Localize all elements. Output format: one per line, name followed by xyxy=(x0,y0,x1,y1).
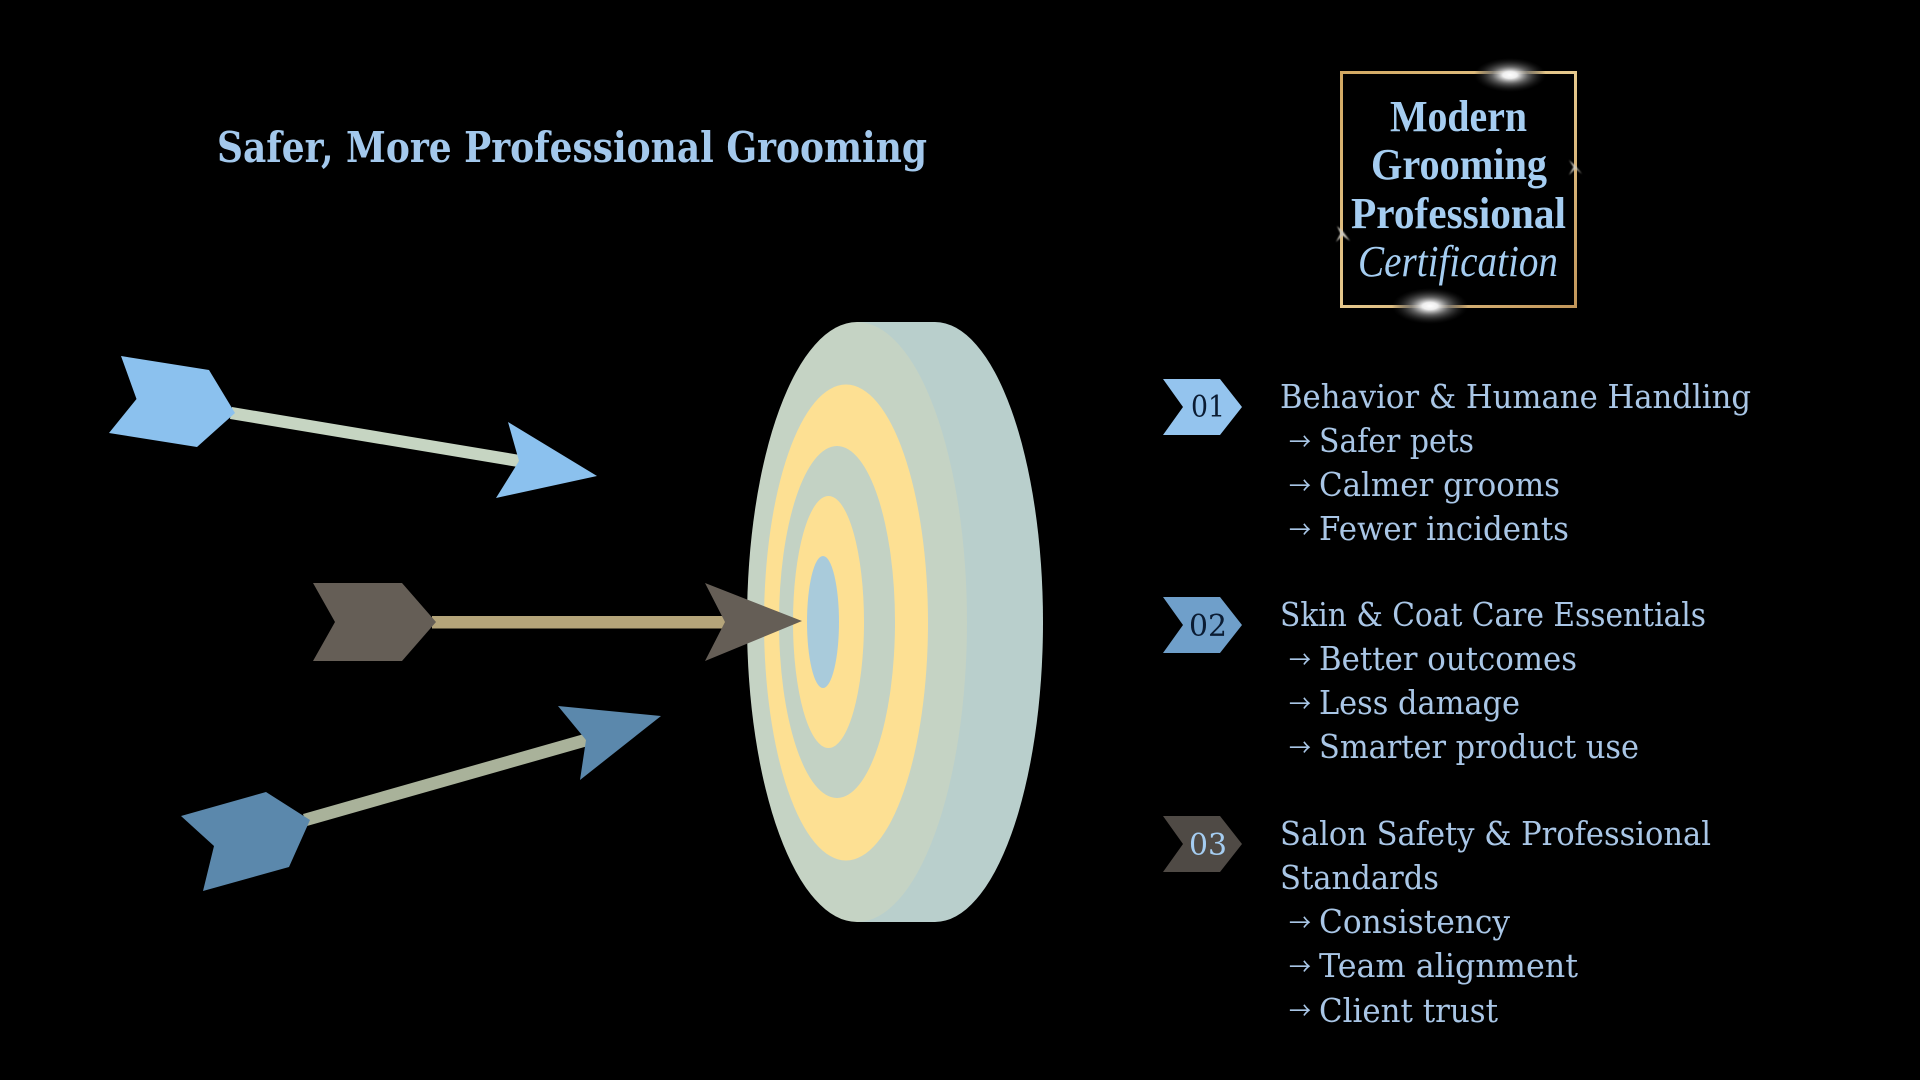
arrow: light blue, missing high xyxy=(109,356,597,498)
shaft xyxy=(230,407,520,467)
arrow: steel blue, missing low xyxy=(181,706,661,891)
heading 01: Behavior & Humane Handling xyxy=(1280,377,1751,416)
arrow: brown, on target xyxy=(313,583,802,661)
badge title text xyxy=(1351,92,1566,286)
bullets 02: → xyxy=(1289,640,1311,675)
arrowhead xyxy=(558,706,661,780)
badge 03: 03 xyxy=(1189,828,1227,863)
bullets 03: → xyxy=(1289,991,1311,1026)
title: Safer, More Professional Grooming xyxy=(217,123,927,172)
bullets 03: Consistency xyxy=(1319,902,1510,941)
heading 02: Skin & Coat Care Essentials xyxy=(1280,595,1706,634)
bullets 01: → xyxy=(1289,422,1311,457)
bullets 01 xyxy=(1289,421,1569,548)
section 01 xyxy=(1163,377,1751,548)
shaft xyxy=(432,616,728,628)
badge title text: Certification xyxy=(1358,237,1558,286)
frame glints xyxy=(1336,58,1582,324)
bullets 01: → xyxy=(1289,466,1311,501)
heading 03: Salon Safety & Professional xyxy=(1280,814,1711,853)
bullets 01: → xyxy=(1289,510,1311,545)
bullets 02: → xyxy=(1289,728,1311,763)
bullets 03: Client trust xyxy=(1319,991,1498,1030)
inner yellow ring xyxy=(793,496,864,748)
target side xyxy=(857,322,1043,922)
bullets 01: Fewer incidents xyxy=(1319,509,1569,548)
sage ring xyxy=(779,446,895,798)
heading 03: Standards xyxy=(1280,858,1439,897)
arrowhead xyxy=(496,422,597,498)
fletching xyxy=(313,583,436,661)
heading 03 xyxy=(1280,814,1711,897)
badge 03 xyxy=(1163,816,1242,872)
bullets 03 xyxy=(1289,902,1578,1030)
bullets 03: Team alignment xyxy=(1319,946,1578,985)
badge 01 xyxy=(1163,379,1242,435)
shaft xyxy=(303,734,588,826)
bullets 02: Better outcomes xyxy=(1319,639,1577,678)
bullets 03: → xyxy=(1289,903,1311,938)
badge gold frame xyxy=(1342,72,1576,306)
badge 02 xyxy=(1163,597,1242,653)
outer yellow ring xyxy=(764,384,928,860)
badge 02: 02 xyxy=(1189,609,1227,644)
bullets 02: Less damage xyxy=(1319,683,1520,722)
badge title text: Professional xyxy=(1351,189,1566,238)
bullets 02: Smarter product use xyxy=(1319,727,1639,766)
badge title text: Modern xyxy=(1390,92,1527,141)
target face xyxy=(747,322,967,922)
section 02 xyxy=(1163,595,1706,766)
bullets 02 xyxy=(1289,639,1639,766)
bullseye xyxy=(807,556,839,688)
certification badge xyxy=(1336,58,1582,324)
target xyxy=(747,322,1043,922)
arrowhead xyxy=(705,583,802,661)
bullets 02: → xyxy=(1289,684,1311,719)
fletching xyxy=(181,792,310,891)
bullets 01: Calmer grooms xyxy=(1319,465,1560,504)
fletching xyxy=(109,356,235,447)
badge 01: 01 xyxy=(1191,390,1225,425)
section 03 xyxy=(1163,814,1711,1030)
badge title text: Grooming xyxy=(1371,140,1547,189)
bullets 01: Safer pets xyxy=(1319,421,1474,460)
bullets 03: → xyxy=(1289,947,1311,982)
